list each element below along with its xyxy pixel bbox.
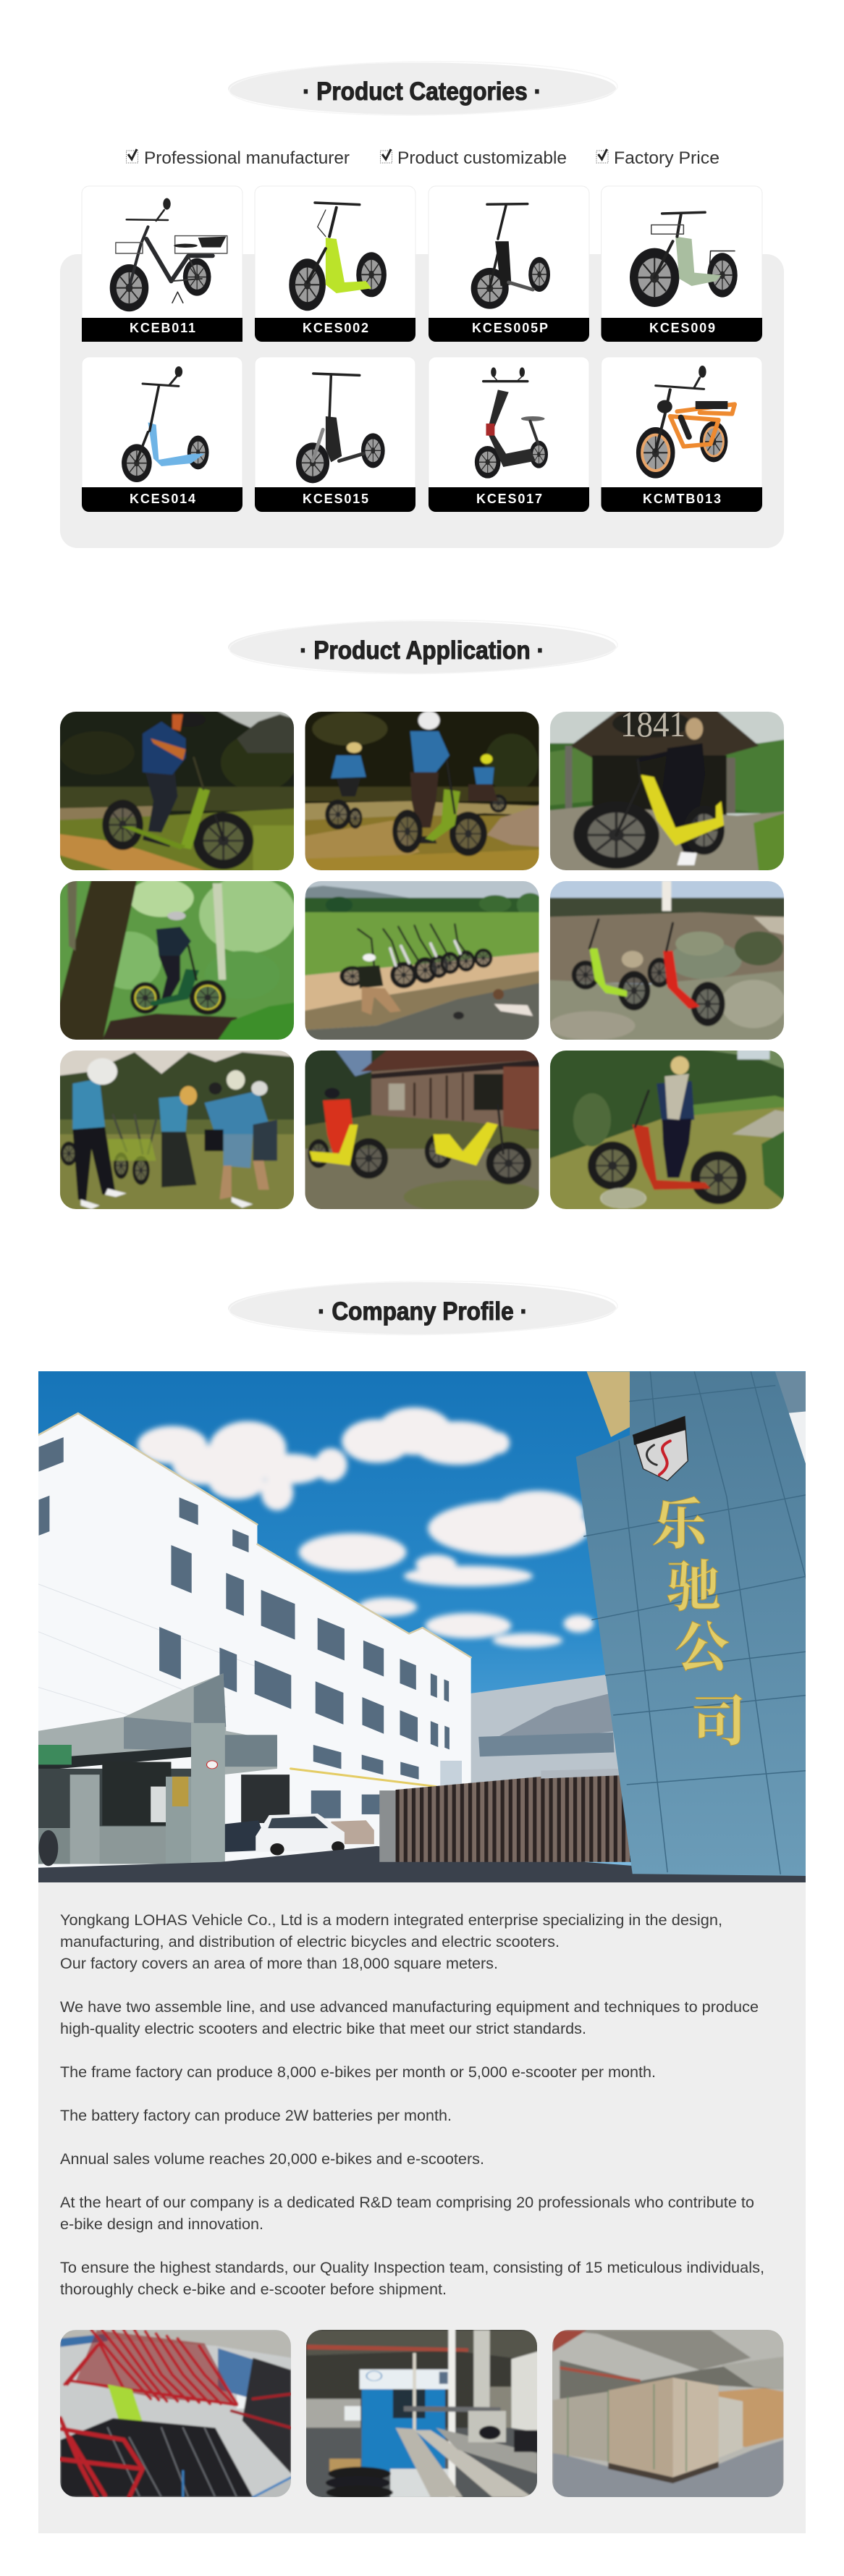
product card: KCEB011: KCEB011 bbox=[130, 321, 195, 335]
heading: Company Profile: · Company Profile · bbox=[318, 1297, 528, 1326]
text block: company description: The battery factory can produce 2W batteries per month. bbox=[60, 2108, 452, 2124]
photo: assembly line bbox=[299, 2326, 547, 2500]
entrance canopy bbox=[38, 1673, 277, 1866]
heading: Product Application: · Product Application · bbox=[300, 636, 544, 665]
lime scooter bbox=[572, 919, 650, 1011]
yellow e-bike bbox=[573, 760, 725, 869]
ground bbox=[33, 1846, 813, 1887]
photo: painted frames on rack bbox=[54, 2326, 301, 2500]
photo: yellow e-bikes by timber barn bbox=[305, 1051, 539, 1209]
panel: company description background bbox=[38, 1882, 806, 2533]
machine bbox=[360, 2370, 451, 2498]
photo: woman on red scooter in garden bbox=[550, 1051, 784, 1209]
lime frames bbox=[108, 2384, 145, 2430]
product card: KCES005P: KCES005P bbox=[472, 321, 548, 335]
product card: KCES009: KCES009 bbox=[649, 321, 715, 335]
scooter: KCES017 bbox=[475, 367, 548, 479]
red scooter bbox=[648, 923, 725, 1026]
red frames foreground bbox=[60, 2418, 143, 2497]
red frames bbox=[64, 2330, 237, 2405]
text block: company description: Annual sales volume reaches 20,000 e-bikes and e-scooters. bbox=[60, 2151, 484, 2168]
parked scooters bbox=[60, 1115, 156, 1185]
text block: company description bbox=[60, 1912, 764, 2298]
feature: product customizable: Product customizable bbox=[397, 148, 567, 168]
panel: product background bbox=[60, 254, 784, 548]
photo: scooter line-up beside rice field and canal bbox=[305, 881, 539, 1040]
scooter: KCES009 bbox=[630, 212, 738, 307]
product card: KCES015: KCES015 bbox=[303, 492, 368, 506]
rider bbox=[156, 912, 191, 999]
scooter: KCES015 bbox=[296, 374, 385, 483]
product card: KCES014: KCES014 bbox=[130, 492, 195, 506]
yellow bike left bbox=[308, 1124, 388, 1179]
conveyor rails bbox=[396, 2411, 539, 2497]
woman bbox=[657, 1056, 694, 1178]
scooter: KCES002 bbox=[289, 203, 387, 311]
text block: company description: Our factory covers an area of more than 18,000 square meters. bbox=[60, 1956, 498, 1972]
product card: KCES002 bbox=[255, 186, 415, 342]
white building bbox=[38, 1413, 471, 1870]
red rider bbox=[323, 1088, 353, 1156]
heading: Product Categories bbox=[228, 59, 617, 117]
feature: factory price: Factory Price bbox=[614, 148, 719, 168]
sliding gate bbox=[379, 1769, 630, 1862]
group bbox=[159, 1070, 277, 1208]
yellow bike right bbox=[425, 1106, 531, 1184]
rider left bbox=[72, 1058, 127, 1209]
windows bbox=[39, 1437, 450, 1818]
photo: rider on green scooter on dirt track bbox=[60, 712, 294, 870]
text block: company description: e-bike design and innovation. bbox=[60, 2216, 263, 2233]
company name sign: 公 bbox=[675, 1604, 730, 1683]
signage tower bbox=[576, 1371, 807, 1876]
text block: company description: Yongkang LOHAS Vehicle Co., Ltd is a modern integrated enterprise specializing in the design, bbox=[60, 1912, 722, 1929]
text block: company description: high-quality electric scooters and electric bike that meet our strict standards. bbox=[60, 2021, 586, 2037]
black frames bbox=[60, 2358, 291, 2497]
text block: company description: manufacturing, and distribution of electric bicycles and electric scooters. bbox=[60, 1934, 560, 1950]
rider bbox=[141, 712, 187, 847]
bike: KCEB011 bbox=[110, 198, 227, 311]
photo: family riders on forest trail bbox=[305, 712, 539, 870]
heading: Product Categories: · Product Categories · bbox=[303, 77, 541, 106]
text block: company description: thoroughly check e-bike and e-scooter before shipment. bbox=[60, 2281, 447, 2298]
product card: KCES014 bbox=[82, 357, 242, 512]
product card: KCMTB013: KCMTB013 bbox=[643, 492, 721, 506]
seated person bbox=[358, 954, 401, 1015]
product card: KCES015 bbox=[255, 357, 415, 512]
text block: company description: The frame factory can produce 8,000 e-bikes per month or 5,000 e-scooter per month. bbox=[60, 2064, 656, 2081]
1841 sign lettering: 1841 bbox=[620, 704, 685, 744]
text block: company description: We have two assemble line, and use advanced manufacturing equipment and techniques to produce bbox=[60, 1999, 759, 2016]
bike: KCMTB013 bbox=[636, 366, 735, 479]
heading: Company Profile bbox=[228, 1279, 617, 1337]
photo: rider in green forest bbox=[60, 881, 294, 1040]
cars bbox=[224, 1814, 374, 1855]
photo: team in jerseys with scooters in meadow bbox=[60, 1051, 294, 1209]
company name sign: 驰 bbox=[666, 1543, 721, 1622]
product card: KCES017 bbox=[429, 357, 589, 512]
centre rider bbox=[410, 711, 450, 843]
swimmers bbox=[453, 989, 533, 1019]
company name sign: 乐 bbox=[651, 1481, 711, 1560]
scooter: KCES014 bbox=[122, 366, 209, 482]
photo: lime and red scooters among lavender bbox=[550, 881, 784, 1040]
product card: KCES009 bbox=[601, 186, 762, 342]
logo shield bbox=[633, 1416, 688, 1481]
feature: professional manufacturer: Professional manufacturer bbox=[144, 148, 350, 168]
product card: KCES005P bbox=[429, 186, 589, 342]
feature checklist bbox=[126, 148, 719, 168]
product card: KCES002: KCES002 bbox=[303, 321, 368, 335]
scooter bbox=[392, 760, 487, 856]
carton boxes bbox=[719, 2388, 784, 2447]
product card: KCES017: KCES017 bbox=[476, 492, 542, 506]
tyres and box bbox=[326, 2459, 393, 2499]
company name sign bbox=[651, 1481, 746, 1756]
text block: company description: At the heart of our company is a dedicated R&D team comprising 20 professionals who contribute to bbox=[60, 2194, 754, 2211]
floor bbox=[553, 2440, 784, 2499]
product card: KCMTB013 bbox=[601, 357, 762, 512]
company name sign: 司 bbox=[691, 1678, 746, 1756]
red scooter bbox=[588, 1091, 746, 1204]
1841 sign bbox=[612, 710, 690, 738]
text block: company description: To ensure the highest standards, our Quality Inspection team, consisting of 15 meticulous individuals, bbox=[60, 2260, 764, 2276]
warehouse bbox=[470, 1675, 618, 1783]
scooter bbox=[102, 758, 253, 870]
photo: woman with yellow e-bike under 1841 gate bbox=[550, 712, 784, 870]
left rider bbox=[325, 742, 366, 830]
wrapped pallets bbox=[553, 2378, 743, 2483]
product card: KCEB011 bbox=[82, 186, 242, 342]
clouds bbox=[138, 1407, 594, 1648]
scooter: KCES005P bbox=[471, 204, 550, 309]
photo grid: applications bbox=[48, 704, 791, 1216]
photo: packed pallets in warehouse bbox=[547, 2326, 791, 2500]
woman bbox=[650, 717, 704, 867]
heading: Product Application bbox=[228, 618, 617, 675]
right child bbox=[468, 754, 507, 813]
photo: factory building and gate bbox=[33, 1368, 813, 1887]
scooter bbox=[130, 946, 226, 1015]
scooter row bbox=[339, 925, 492, 988]
